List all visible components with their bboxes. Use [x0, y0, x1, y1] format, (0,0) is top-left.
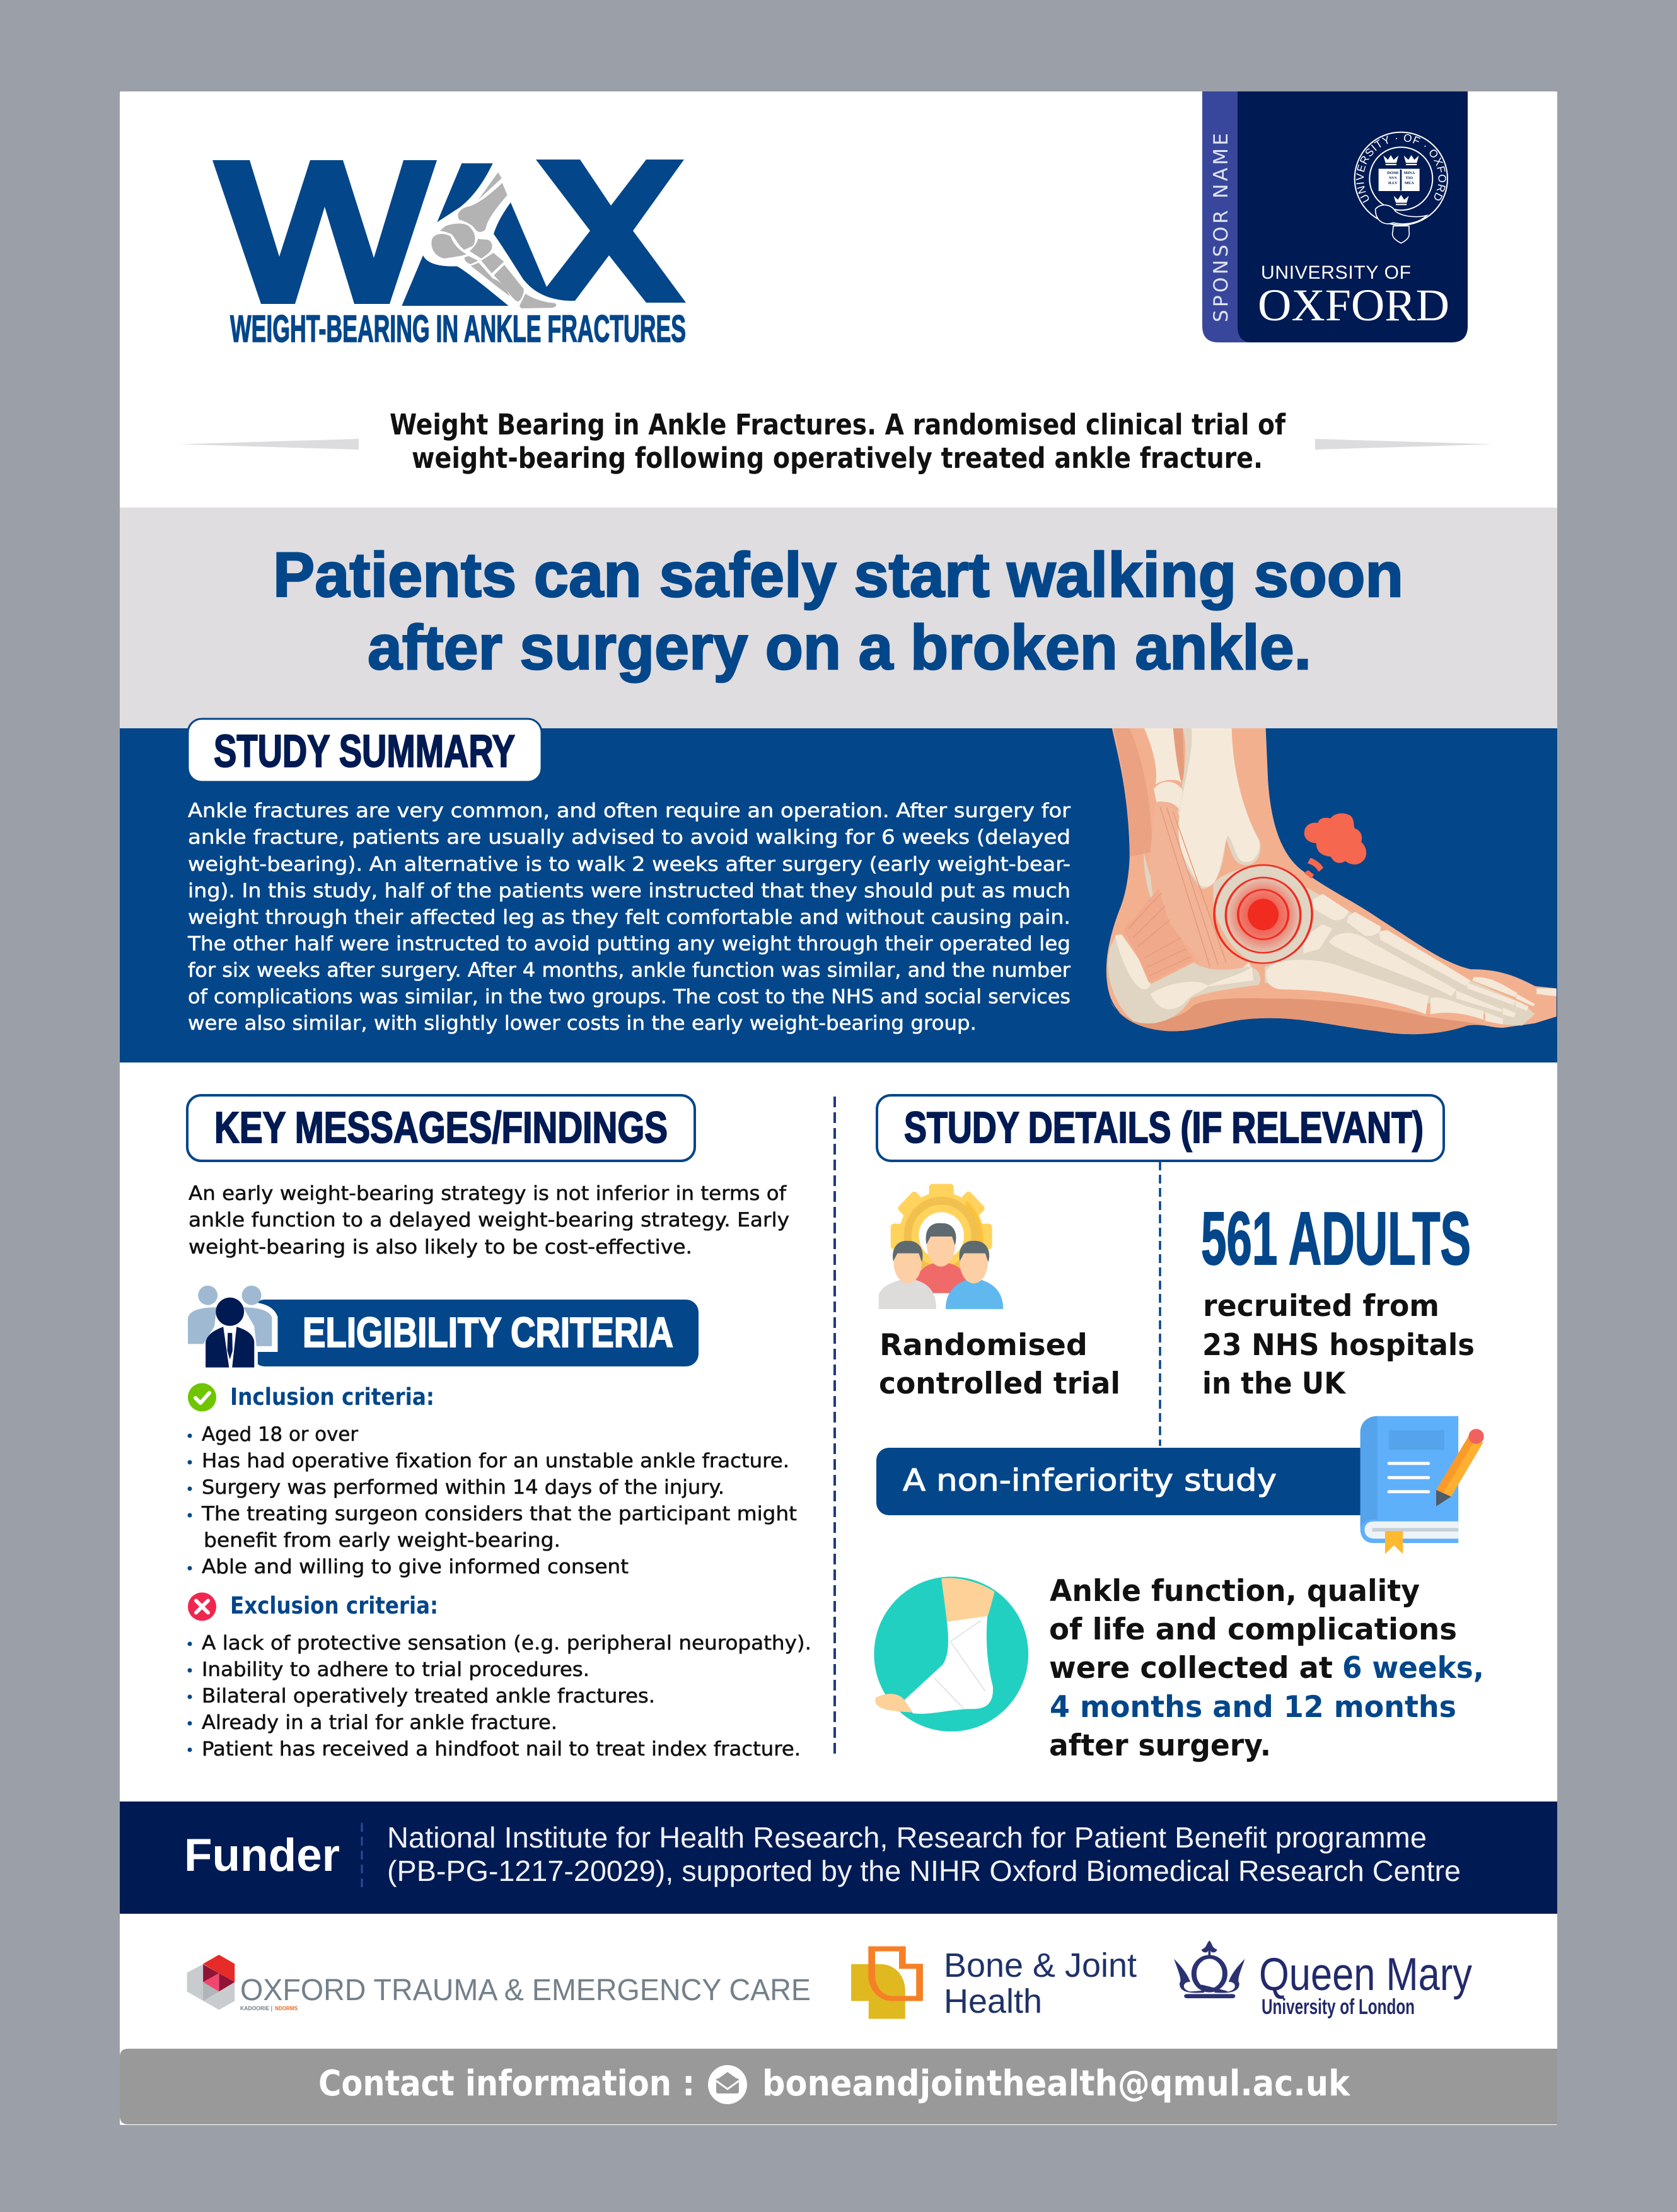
inclusion list: Aged 18 or over	[202, 1423, 358, 1446]
exclusion list: A lack of protective sensation (e.g. peripheral neuropathy).	[202, 1632, 811, 1655]
outcomes text: 4 months and 12 months	[1050, 1690, 1456, 1725]
panel: eligibility criteria	[188, 1286, 811, 1761]
summary heading: STUDY SUMMARY	[214, 726, 515, 777]
outcomes text: after surgery.	[1049, 1728, 1271, 1763]
outcomes text: Ankle function, quality	[1050, 1574, 1420, 1609]
Oxford crest: TIO	[1405, 176, 1413, 180]
summary text: Ankle fractures are very common, and often require an operation. After surgery for	[188, 800, 1071, 822]
randomised trial label	[879, 1328, 1120, 1401]
inclusion list: benefit from early weight-bearing.	[204, 1529, 560, 1552]
contact label: Contact information :	[318, 2063, 695, 2104]
logo tagline: WEIGHT-BEARING IN ANKLE FRACTURES	[230, 308, 686, 350]
logo letters	[212, 160, 686, 306]
logo: Queen Mary University of London: University of London	[1262, 1995, 1415, 2019]
sponsor panel: University of Oxford	[1202, 91, 1468, 342]
exclusion list	[188, 1632, 811, 1761]
study details heading	[877, 1095, 1444, 1161]
summary text: The other half were instructed to avoid putting any weight through their operated leg	[187, 933, 1071, 955]
inclusion list: The treating surgeon considers that the participant might	[201, 1503, 797, 1525]
summary text: for six weeks after surgery. After 4 months, ankle function was similar, and the number	[188, 959, 1071, 982]
crown mark	[1174, 1940, 1245, 1998]
summary text: ankle fracture, patients are usually advised to avoid walking for 6 weeks (delayed	[188, 826, 1071, 849]
outcomes text: of life and complications	[1049, 1612, 1457, 1647]
headline band	[120, 508, 1557, 728]
panel: study details	[874, 1095, 1484, 1763]
number of adults: 561 ADULTS	[1201, 1197, 1471, 1281]
logo: Queen Mary University of London: Queen Mary	[1259, 1949, 1472, 2000]
trial title	[180, 408, 1493, 475]
funder text: (PB-PG-1217-20029), supported by the NIHR Oxford Biomedical Research Centre	[387, 1854, 1461, 1887]
inclusion list	[188, 1423, 797, 1578]
exclusion heading: Exclusion criteria:	[230, 1592, 438, 1619]
logo: Bone & Joint Health: Bone & Joint	[944, 1947, 1137, 1984]
icon: book and pencil	[1361, 1416, 1484, 1554]
summary text: were also similar, with slightly lower costs in the early weight-bearing group.	[188, 1012, 977, 1035]
poster card	[120, 91, 1557, 2125]
inclusion list: Has had operative fixation for an unstable ankle fracture.	[202, 1450, 789, 1472]
key messages heading: KEY MESSAGES/FINDINGS	[214, 1103, 668, 1152]
eligibility heading text: ELIGIBILITY CRITERIA	[303, 1309, 673, 1356]
icon: bandaged foot	[874, 1576, 1028, 1732]
Oxford crest: MINA	[1404, 171, 1415, 175]
funder text: National Institute for Health Research, Research for Patient Benefit programme	[387, 1821, 1427, 1854]
contact email: boneandjointhealth@qmul.ac.uk	[762, 2063, 1351, 2104]
summary text: weight through their affected leg as they felt comfortable and without causing pain.	[188, 906, 1071, 929]
Oxford crest	[1354, 131, 1448, 244]
Oxford wordmark: OXFORD	[1258, 280, 1449, 330]
summary text: of complications was similar, in the two groups. The cost to the NHS and social services	[188, 986, 1071, 1008]
ankle bones in logo	[431, 172, 556, 308]
logo: Oxford Trauma & Emergency Care: OXFORD TRAUMA & EMERGENCY CARE	[240, 1974, 811, 2007]
non-inferiority bar: A non-inferiority study	[903, 1463, 1277, 1498]
Oxford crest: DOMI	[1387, 171, 1399, 175]
recruitment text	[1202, 1289, 1475, 1401]
sponsor band	[1202, 91, 1255, 342]
Oxford crest: UNIVERSITY · OF · OXFORD	[1355, 134, 1446, 203]
Oxford crest: MEA	[1405, 181, 1414, 185]
inclusion heading: Inclusion criteria:	[230, 1383, 434, 1411]
recruitment text: in the UK	[1202, 1366, 1346, 1401]
key messages text: An early weight-bearing strategy is not inferior in terms of	[189, 1182, 787, 1205]
randomised trial label: Randomised	[879, 1328, 1088, 1363]
icon: envelope	[708, 2065, 747, 2104]
trial title: weight-bearing following operatively treated ankle fracture.	[412, 441, 1263, 475]
key messages text: weight-bearing is also likely to be cost-effective.	[189, 1236, 692, 1259]
key messages text	[189, 1182, 789, 1259]
summary heading	[188, 719, 542, 782]
funder label: Funder	[184, 1830, 340, 1881]
headline band: Patients can safely start walking soon	[273, 540, 1403, 610]
Oxford crest: NVS	[1389, 176, 1397, 180]
logo: Oxford Trauma & Emergency Care: NDORMS	[275, 2005, 298, 2011]
hexagon mark	[187, 1955, 235, 2010]
exclusion list: Inability to adhere to trial procedures.	[202, 1658, 589, 1681]
panel: funder	[120, 1802, 1557, 1914]
summary text	[187, 800, 1071, 1035]
summary text: ing). In this study, half of the patients were instructed that they should put as much	[188, 880, 1071, 902]
eligibility heading bar	[252, 1300, 699, 1366]
WAX logo	[212, 160, 686, 350]
outcomes text: were collected at	[1049, 1651, 1333, 1685]
logo: Queen Mary University of London	[1174, 1940, 1472, 2019]
logo: Bone & Joint Health: Health	[944, 1982, 1042, 2020]
panel: key messages	[187, 1095, 789, 1259]
exclusion list: Already in a trial for ankle fracture.	[202, 1711, 557, 1734]
panel: contact information	[120, 2049, 1557, 2124]
icon: team with gear	[879, 1184, 1003, 1309]
logo: Bone & Joint Health	[851, 1947, 1137, 2020]
recruitment text: 23 NHS hospitals	[1202, 1328, 1475, 1363]
non-inferiority bar	[876, 1448, 1381, 1515]
inclusion list: Able and willing to give informed consent	[202, 1556, 629, 1578]
Oxford crest: ILLV	[1388, 181, 1398, 185]
recruitment text: recruited from	[1203, 1289, 1439, 1324]
inclusion list: Surgery was performed within 14 days of the injury.	[202, 1476, 724, 1499]
headline band: after surgery on a broken ankle.	[368, 612, 1311, 683]
study details heading: STUDY DETAILS (IF RELEVANT)	[904, 1103, 1424, 1152]
navy panel	[1238, 91, 1468, 342]
funder text	[387, 1821, 1461, 1887]
logo: Oxford Trauma & Emergency Care	[187, 1955, 811, 2011]
trial title: Weight Bearing in Ankle Fractures. A randomised clinical trial of	[390, 408, 1285, 441]
logo: Oxford Trauma & Emergency Care: KADOORIE |	[240, 2005, 272, 2011]
icon: group of people	[188, 1286, 274, 1368]
exclusion list: Bilateral operatively treated ankle fractures.	[202, 1685, 655, 1708]
University of: UNIVERSITY OF	[1261, 262, 1411, 283]
key messages heading	[187, 1095, 695, 1161]
cross mark	[851, 1949, 920, 2019]
icon: red cross	[188, 1593, 216, 1621]
panel: study summary	[120, 719, 1557, 1062]
outcomes text: 6 weeks,	[1342, 1651, 1484, 1685]
key messages text: ankle function to a delayed weight-bearing strategy. Early	[189, 1209, 789, 1231]
exclusion list: Patient has received a hindfoot nail to treat index fracture.	[202, 1738, 801, 1761]
sponsor label: SPONSOR NAME	[1210, 133, 1233, 322]
summary text: weight-bearing). An alternative is to walk 2 weeks after surgery (early weight-bear-	[188, 853, 1071, 876]
randomised trial label: controlled trial	[879, 1366, 1120, 1401]
outcomes text	[1049, 1574, 1484, 1763]
icon: green check	[188, 1383, 216, 1411]
illustration: ankle with pain point	[1106, 728, 1557, 1034]
